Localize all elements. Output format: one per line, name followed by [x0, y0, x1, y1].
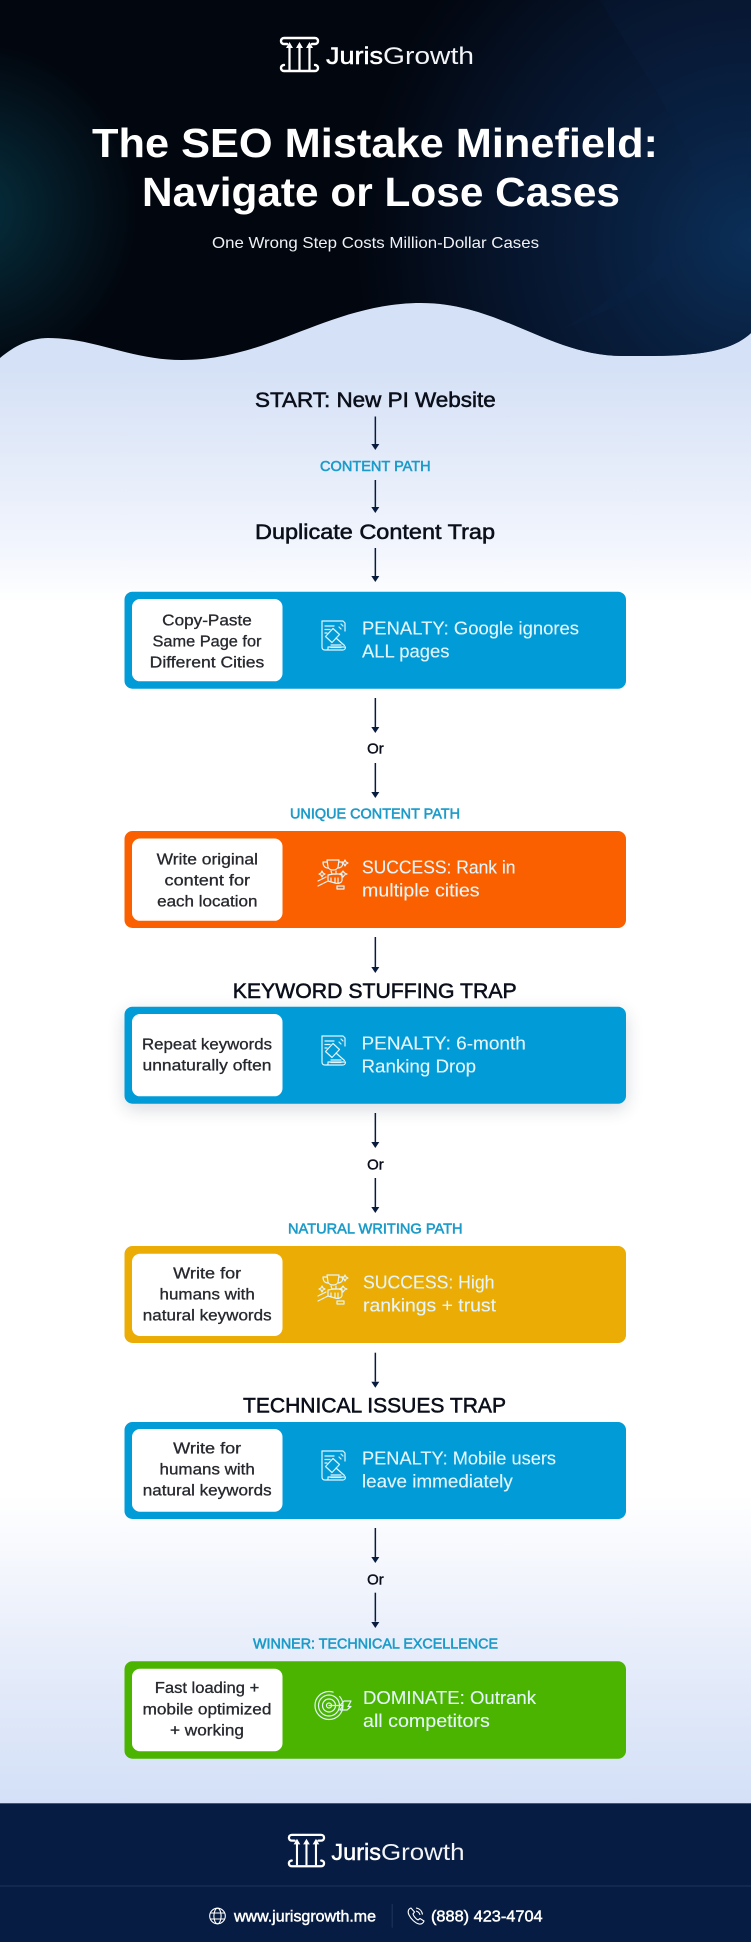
website: www.jurisgrowth.me [233, 1908, 376, 1926]
outcome text: all competitors [363, 1710, 490, 1731]
arrow [371, 480, 379, 513]
action box: Write for [173, 1266, 241, 1283]
icon: document with gavel [322, 1036, 346, 1065]
outcome text: DOMINATE: Outrank [363, 1687, 537, 1708]
outcome text [362, 856, 516, 900]
heading: technical issues trap: TECHNICAL ISSUES TRAP [243, 1394, 506, 1418]
logo: header: Growth [383, 43, 474, 70]
outcome text [363, 1687, 537, 1731]
arrow [371, 698, 379, 733]
logo: footer [289, 1835, 464, 1866]
label: content path: CONTENT PATH [320, 459, 431, 475]
panel: original content success [124, 831, 626, 928]
arrow [371, 1178, 379, 1213]
logo: header [281, 38, 474, 71]
outcome text: rankings + trust [363, 1294, 496, 1316]
label: unique content path: UNIQUE CONTENT PATH [290, 806, 460, 822]
outcome text [362, 1448, 556, 1492]
action box [132, 1014, 282, 1096]
action box: humans with [160, 1287, 255, 1304]
panel: natural writing success [124, 1246, 626, 1343]
outcome text: Ranking Drop [362, 1056, 476, 1076]
arrow [371, 1593, 379, 1628]
arrow [371, 1113, 379, 1148]
subtitle: One Wrong Step Costs Million-Dollar Cases [212, 235, 539, 252]
icon: document with gavel [322, 621, 346, 650]
outcome text: PENALTY: Google ignores [362, 618, 579, 638]
action box: natural keywords [143, 1308, 272, 1325]
panel: technical issues penalty [124, 1422, 626, 1519]
or label: Or [367, 1572, 384, 1588]
outcome text [362, 618, 579, 662]
icon: phone [408, 1908, 424, 1924]
action box: Fast loading + [155, 1680, 259, 1697]
arrow [371, 548, 379, 582]
logo: footer: Growth [381, 1839, 464, 1865]
action box: Same Page for [152, 634, 262, 650]
heading: keyword stuffing trap: KEYWORD STUFFING TRAP [233, 979, 517, 1003]
arrow [371, 763, 379, 798]
panel: copy-paste penalty [124, 592, 626, 689]
header panel [0, 0, 751, 360]
panel: keyword stuffing penalty [124, 1007, 626, 1109]
action box: Copy-Paste [162, 612, 252, 630]
or label: Or [367, 742, 384, 758]
heading: duplicate content trap: Duplicate Content Trap [255, 520, 495, 544]
title: Navigate or Lose Cases [142, 169, 620, 215]
outcome text [363, 1272, 496, 1316]
arrow [371, 937, 379, 973]
action box: natural keywords [143, 1483, 272, 1500]
action box: Repeat keywords [142, 1036, 272, 1054]
arrow [371, 416, 379, 450]
logo: header: Juris [326, 43, 383, 70]
phone number: (888) 423-4704 [431, 1908, 543, 1926]
action box [132, 1669, 282, 1751]
title: The SEO Mistake Minefield: [92, 120, 658, 166]
label: natural writing path: NATURAL WRITING PATH [288, 1222, 463, 1238]
outcome text [362, 1032, 526, 1076]
action box: Different Cities [150, 654, 265, 672]
action box: mobile optimized [143, 1702, 271, 1718]
action box: Write original [157, 852, 258, 868]
action box [132, 599, 282, 681]
or label: Or [367, 1158, 384, 1174]
outcome text: ALL pages [362, 640, 450, 662]
outcome text: multiple cities [362, 880, 480, 900]
outcome text: SUCCESS: Rank in [362, 856, 516, 878]
heading: start: START: New PI Website [255, 388, 496, 412]
action box [132, 838, 282, 921]
action box: content for [165, 872, 250, 890]
footer panel [0, 1803, 751, 1942]
action box: humans with [160, 1462, 255, 1479]
label: winner: WINNER: TECHNICAL EXCELLENCE [253, 1636, 498, 1652]
action box: Write for [173, 1440, 241, 1458]
arrow [371, 1528, 379, 1563]
logo: footer: Juris [331, 1839, 381, 1865]
action box: each location [157, 894, 258, 910]
action box [132, 1254, 282, 1336]
icon: globe [210, 1908, 225, 1924]
outcome text: leave immediately [362, 1470, 514, 1492]
arrow [371, 1353, 379, 1388]
outcome text: PENALTY: 6-month [362, 1032, 526, 1054]
outcome text: PENALTY: Mobile users [362, 1448, 556, 1468]
action box [132, 1429, 282, 1512]
outcome text: SUCCESS: High [363, 1272, 494, 1292]
icon: target [315, 1692, 351, 1720]
title [92, 120, 658, 215]
icon: trophy [318, 860, 348, 889]
icon: trophy [318, 1275, 348, 1304]
panel: dominate [124, 1661, 626, 1759]
action box: + working [170, 1722, 244, 1740]
icon: document with gavel [322, 1451, 346, 1480]
action box: unnaturally often [142, 1058, 272, 1074]
